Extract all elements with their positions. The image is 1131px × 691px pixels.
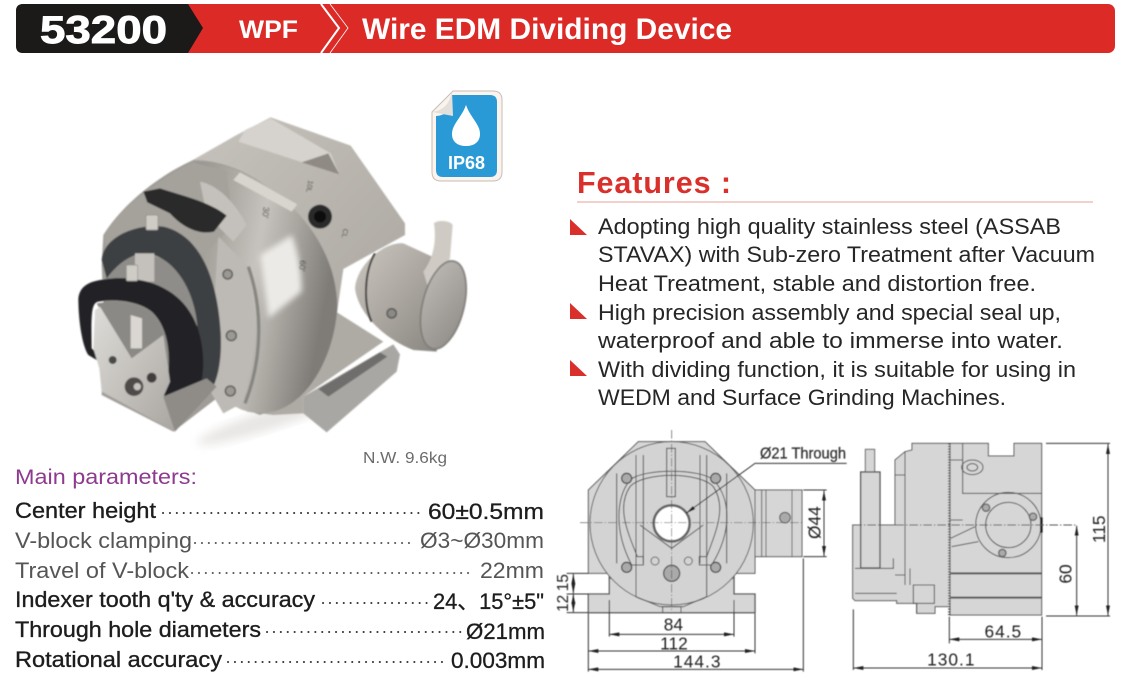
lower black yoke: [78, 278, 203, 402]
product photo: [78, 117, 474, 453]
main body: [853, 443, 1042, 615]
parameter values: 60±0.5mm: [428, 499, 544, 524]
product photo: 60': [297, 260, 308, 272]
dimension labels: 15: [555, 574, 572, 591]
dimension labels: 64.5: [984, 621, 1022, 641]
parameter labels: Center height: [15, 498, 156, 523]
jaw outline: [617, 448, 727, 613]
mounting foot: [303, 344, 400, 432]
through-hole callout: Ø21 Through: [760, 446, 846, 463]
circular face: [590, 442, 753, 605]
parameter labels: V-block clamping: [15, 528, 192, 553]
model number: 53200: [40, 9, 167, 52]
upper dark arch: [102, 226, 221, 402]
scale plate: [233, 172, 297, 212]
water drop: [452, 105, 480, 146]
IP68 label: IP68: [448, 153, 485, 173]
parameter values: Ø21mm: [466, 619, 545, 644]
indexing knob: [355, 243, 447, 352]
parameter values: 24、15°±5": [433, 589, 544, 614]
inner yoke background: [97, 302, 166, 378]
through-hole callout: [686, 446, 847, 513]
plate screws: [223, 270, 236, 396]
parameter labels: Indexer tooth q'ty & accuracy: [15, 587, 315, 612]
feature text: Heat Treatment, stable and distortion free.: [598, 271, 1036, 296]
dark handle piece: [143, 188, 227, 233]
dimension labels: 60: [1056, 564, 1076, 584]
net weight: N.W. 9.6kg: [363, 450, 447, 467]
base: [588, 573, 755, 613]
parameter values: 22mm: [480, 558, 544, 583]
guide pins: [135, 253, 154, 282]
feature text: waterproof and able to immerse into water.: [597, 328, 1063, 353]
parameters heading: Main parameters:: [15, 466, 197, 489]
model number plate: [16, 4, 203, 53]
feature text: WEDM and Surface Grinding Machines.: [598, 385, 1006, 410]
front clamp plate: [207, 237, 255, 413]
IP68 badge: [432, 91, 502, 181]
through hole: [654, 505, 690, 541]
feature bullet 1: [570, 219, 587, 235]
top studs: [126, 215, 158, 281]
center line: [853, 523, 1077, 526]
rear housing block: [190, 117, 405, 352]
feature text: [597, 214, 1095, 410]
model code: WPF: [239, 16, 298, 44]
dimension labels: [555, 506, 825, 671]
parameter values: 0.003mm: [451, 648, 545, 673]
engraved marks: 30': [260, 206, 271, 219]
octagon body: [588, 442, 755, 578]
product title: Wire EDM Dividing Device: [362, 13, 732, 46]
feature text: With dividing function, it is suitable for using in: [598, 357, 1076, 382]
right cylinder: [753, 490, 802, 557]
parameter values: [420, 499, 545, 673]
parameter labels: [15, 498, 315, 672]
dimension labels: 115: [1089, 516, 1109, 543]
features panel: [570, 166, 1095, 410]
feature bullet 2: [570, 303, 587, 319]
silhouette fill behind front parts: [102, 160, 337, 432]
feature text: Adopting high quality stainless steel (ASSAB: [598, 214, 1061, 239]
parameter labels: Travel of V-block: [15, 558, 190, 583]
product photo: CL: [340, 228, 350, 239]
side view drawing: [853, 443, 1110, 670]
dot leaders: [163, 513, 472, 662]
dimension labels: 12: [555, 595, 572, 612]
features heading: Features :: [577, 166, 731, 200]
dimensions: [853, 443, 1110, 670]
parameter labels: Rotational accuracy: [15, 647, 222, 672]
mounting screws: [622, 473, 721, 581]
lock hole: [308, 205, 332, 229]
rear disk top: [103, 162, 233, 272]
V block: [93, 307, 175, 432]
header banner: [16, 4, 1115, 53]
handle post: [861, 449, 880, 568]
main parameters panel: [15, 466, 545, 673]
product photo: 10L: [304, 180, 315, 193]
dimension labels: 112: [660, 633, 688, 653]
dimension labels: [927, 516, 1109, 669]
dimension labels: 130.1: [927, 649, 976, 669]
body details: [855, 443, 1042, 613]
front view drawing: [555, 430, 847, 672]
feature text: High precision assembly and special seal up,: [598, 300, 1061, 325]
center lines: [580, 430, 803, 613]
dimension labels: 84: [664, 615, 683, 635]
knob end cap: [412, 256, 474, 354]
dimensions: [567, 490, 827, 672]
ground shadow: [194, 384, 353, 453]
dimension labels: 144.3: [673, 651, 722, 671]
feature bullet 3: [570, 360, 587, 376]
chevron divider: [321, 4, 348, 53]
main rotary cylinder: [180, 162, 337, 413]
parameter labels: Through hole diameters: [15, 617, 261, 642]
dimension labels: Ø44: [805, 506, 825, 539]
parameter values: Ø3~Ø30mm: [420, 528, 544, 553]
feature text: STAVAX) with Sub-zero Treatment after Vacuum: [598, 242, 1095, 267]
lever: [423, 221, 453, 288]
pedestal: [247, 302, 383, 415]
inner recess behind arch: [100, 256, 201, 378]
